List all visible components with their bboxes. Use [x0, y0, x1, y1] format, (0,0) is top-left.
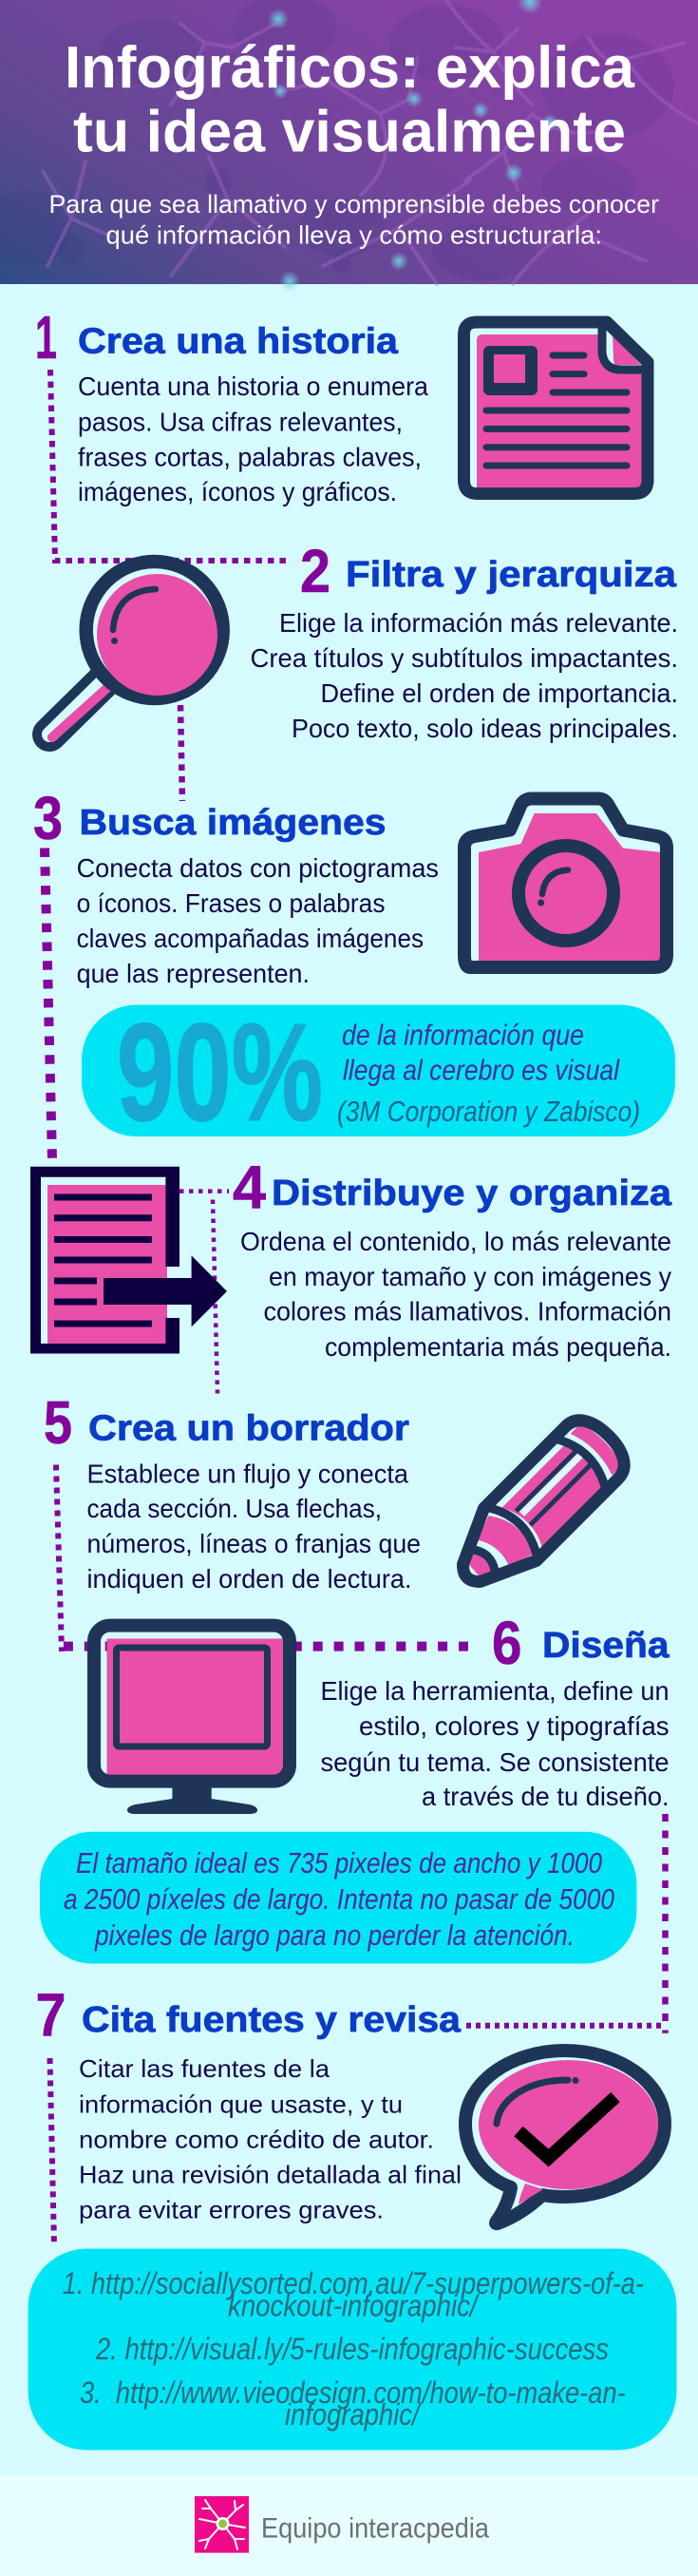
- icon: monitor: [94, 1626, 290, 1814]
- step 6 number: 6: [492, 1609, 522, 1677]
- callout text: llega al cerebro es visual: [343, 1054, 620, 1087]
- step 2 text: Crea títulos y subtítulos impactantes.: [251, 643, 678, 673]
- callout text: de la información que: [342, 1019, 584, 1052]
- panel: step 7: [28, 1980, 676, 2450]
- step 1 text: imágenes, íconos y gráficos.: [78, 477, 397, 506]
- connector: step 3 to step 4: [45, 848, 52, 1160]
- step 1 number: 1: [35, 303, 57, 372]
- callout: ideal size: [40, 1832, 636, 1963]
- footer: [0, 2475, 698, 2576]
- step 7 text: información que usaste, y tu: [79, 2089, 403, 2118]
- step 2 heading: Filtra y jerarquiza: [346, 555, 677, 595]
- step 1 text: frases cortas, palabras claves,: [78, 442, 422, 471]
- callout text: (3M Corporation y Zabisco): [337, 1095, 640, 1128]
- step 6 text: [321, 1676, 670, 1811]
- connector: step 5 to step 6: [58, 1642, 468, 1651]
- callout: 90%: [82, 995, 675, 1150]
- step 5 text: cada sección. Usa flechas,: [87, 1494, 382, 1523]
- step 3 number: 3: [33, 784, 63, 852]
- source 1: knockout-infographic/: [228, 2288, 480, 2322]
- source 1: [63, 2266, 644, 2322]
- icon: interacpedia logo: [195, 2496, 249, 2553]
- icon: camera: [464, 798, 667, 967]
- title: Infográficos: explica: [65, 35, 635, 101]
- step 3 text: o íconos. Frases o palabras: [77, 888, 385, 918]
- step 2 text: Define el orden de importancia.: [321, 678, 678, 708]
- icon: pencil: [441, 1409, 635, 1604]
- step 4 text: colores más llamativos. Información: [264, 1297, 671, 1326]
- step 2 number: 2: [300, 537, 330, 605]
- connector: step 6 to step 7: [662, 1814, 669, 2033]
- step 5 heading: Crea un borrador: [88, 1409, 409, 1449]
- footer text: Equipo interacpedia: [261, 2513, 489, 2545]
- panel: step 5: [44, 1388, 635, 1604]
- source 3: [80, 2376, 626, 2432]
- subtitle: Para que sea llamativo y comprensible debes conocer: [49, 190, 659, 219]
- step 5 number: 5: [44, 1388, 72, 1457]
- step 2 text: [251, 608, 678, 743]
- callout text: El tamaño ideal es 735 pixeles de ancho y 1000: [76, 1846, 602, 1880]
- panel: step 4: [30, 1153, 672, 1362]
- step 2 text: Elige la información más relevante.: [279, 608, 678, 638]
- icon: magnifying glass: [49, 562, 223, 737]
- sources box: [28, 2248, 676, 2450]
- step 1 text: Cuenta una historia o enumera: [78, 372, 428, 401]
- callout text: [337, 1019, 640, 1128]
- step 7 text: Haz una revisión detallada al final: [79, 2161, 462, 2189]
- step 3 heading: Busca imágenes: [80, 803, 386, 843]
- step 1 text: [78, 372, 428, 506]
- panel: step 2: [49, 537, 678, 743]
- subtitle: [49, 190, 659, 249]
- step 5 text: [87, 1460, 421, 1593]
- step 7 number: 7: [36, 1980, 66, 2049]
- step 6 text: a través de tu diseño.: [422, 1782, 670, 1811]
- step 4 number: 4: [233, 1153, 266, 1221]
- icon: document: [463, 322, 650, 494]
- step 2 text: Poco texto, solo ideas principales.: [292, 714, 678, 743]
- step 4 heading: Distribuye y organiza: [272, 1174, 672, 1213]
- step 7 text: nombre como crédito de autor.: [79, 2125, 434, 2153]
- connector: step 1 to step 2: [50, 370, 292, 561]
- subtitle: qué información lleva y cómo estructurarla:: [106, 220, 602, 249]
- source 3: infographic/: [285, 2397, 422, 2432]
- icon: speech bubble with check: [465, 2051, 665, 2223]
- title: [65, 35, 635, 165]
- step 6 text: según tu tema. Se consistente: [321, 1747, 669, 1777]
- step 4 text: complementaria más pequeña.: [325, 1332, 671, 1362]
- step 4 text: [240, 1227, 671, 1362]
- connector: step 4 dotted branch: [179, 1192, 229, 1393]
- step 4 text: en mayor tamaño y con imágenes y: [269, 1262, 671, 1291]
- step 5 text: indiquen el orden de lectura.: [87, 1564, 412, 1593]
- source 2: 2. http://visual.ly/5-rules-infographic-success: [95, 2332, 609, 2366]
- connector: step 5 vertical: [56, 1465, 62, 1651]
- header banner: [0, 0, 698, 292]
- step 7 text: Citar las fuentes de la: [79, 2054, 330, 2083]
- step 7 heading: Cita fuentes y revisa: [82, 2000, 462, 2040]
- step 4 text: Ordena el contenido, lo más relevante: [240, 1227, 671, 1256]
- step 3 text: [77, 853, 439, 988]
- connector: step 7 horizontal: [466, 2023, 665, 2029]
- step 7 text: [79, 2054, 462, 2224]
- step 6 text: estilo, colores y tipografías: [359, 1711, 670, 1741]
- step 3 text: Conecta datos con pictogramas: [77, 853, 439, 883]
- big stat 90%: 90%: [117, 995, 323, 1150]
- connector: step 7 to sources: [49, 2058, 54, 2245]
- connector: step 2 to step 3: [180, 705, 182, 801]
- step 6 text: Elige la herramienta, define un: [321, 1676, 669, 1706]
- step 7 text: para evitar errores graves.: [79, 2196, 384, 2224]
- step 5 text: números, líneas o franjas que: [87, 1529, 421, 1558]
- step 1 text: pasos. Usa cifras relevantes,: [78, 408, 403, 437]
- callout text: pixeles de largo para no perder la atención.: [94, 1918, 575, 1952]
- panel: step 1: [35, 303, 650, 506]
- panel: step 6: [40, 1609, 670, 1963]
- callout text: [64, 1846, 614, 1952]
- icon: document with arrow: [30, 1167, 227, 1353]
- step 6 heading: Diseña: [542, 1626, 670, 1666]
- callout text: a 2500 píxeles de largo. Intenta no pasar de 5000: [64, 1882, 614, 1916]
- step 1 heading: Crea una historia: [78, 321, 399, 361]
- title: tu idea visualmente: [73, 100, 626, 165]
- step 3 text: que las representen.: [77, 959, 310, 988]
- step 3 text: claves acompañadas imágenes: [77, 924, 424, 953]
- step 5 text: Establece un flujo y conecta: [87, 1460, 408, 1489]
- panel: step 3: [33, 784, 675, 1150]
